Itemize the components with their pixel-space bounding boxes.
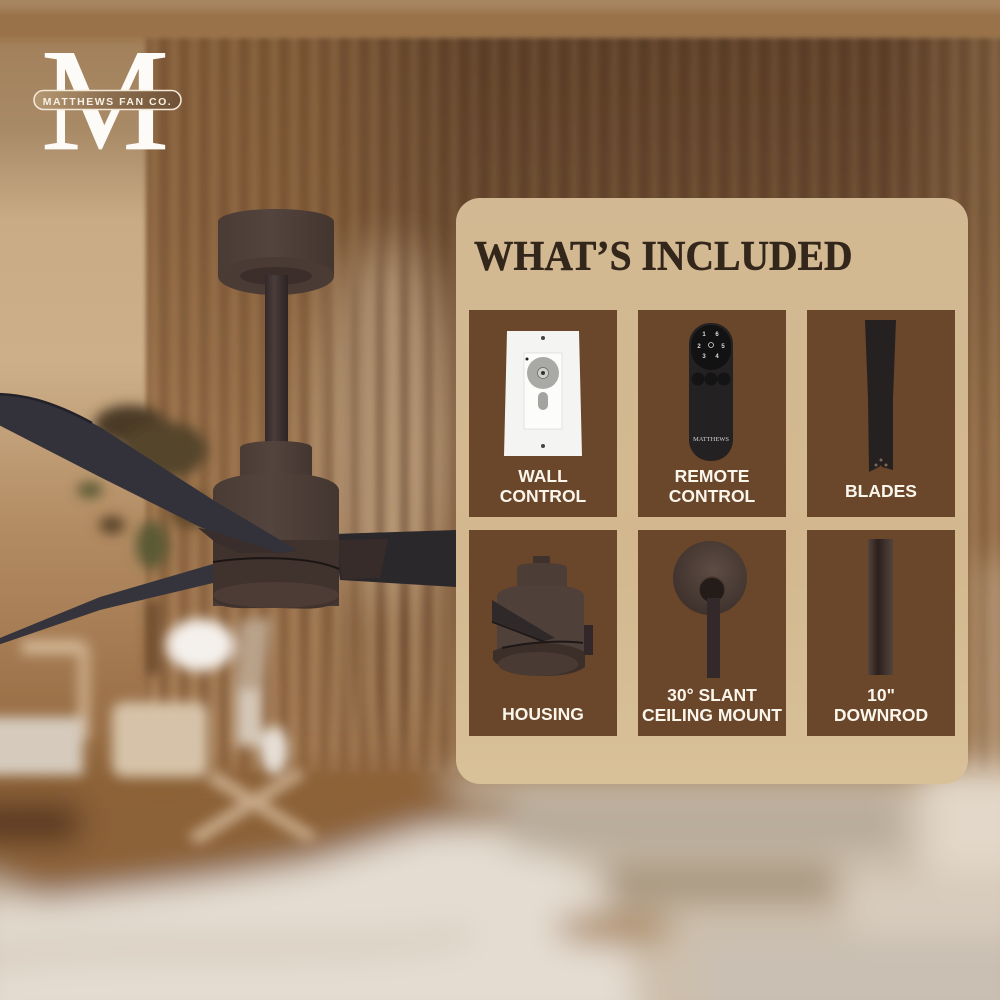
- top ceiling band: [0, 0, 1000, 40]
- label: HOUSING: [502, 704, 584, 724]
- label: [500, 466, 586, 506]
- light patch on wood: [315, 240, 455, 600]
- icon: downrod: [868, 539, 893, 675]
- icon: remote control: MATTHEWS: [693, 436, 729, 443]
- label: WALL: [518, 466, 568, 486]
- logo: Matthews Fan Co.: [33, 40, 182, 160]
- ceiling canopy: [218, 209, 334, 276]
- label: BLADES: [845, 481, 917, 501]
- logo band: MATTHEWS FAN CO.: [43, 96, 172, 108]
- icon: remote control: 2: [697, 344, 701, 350]
- icon: remote control: 3: [702, 354, 706, 360]
- blurred plant: [77, 405, 210, 675]
- light strip right of the panel: [975, 560, 1000, 770]
- fan blade: left upper: [0, 394, 297, 553]
- motor housing: [240, 441, 312, 478]
- label: CONTROL: [500, 486, 586, 506]
- card: 10 inch downrod: [807, 530, 955, 736]
- heading: WHAT’S INCLUDED: [474, 233, 853, 280]
- icon: remote control: 5: [721, 344, 725, 350]
- icon: slant ceiling mount: [673, 541, 747, 678]
- icon: remote control: 1: [702, 332, 706, 338]
- card: 30 degree slant ceiling mount: [638, 530, 786, 736]
- icon: remote control: 6: [715, 332, 719, 338]
- card: remote control: [638, 310, 786, 517]
- card: blades: [807, 310, 955, 517]
- blade bracket: [198, 528, 296, 553]
- label: [834, 685, 928, 724]
- label: DOWNROD: [834, 704, 928, 724]
- icon: wall control: [504, 331, 582, 456]
- label: CEILING MOUNT: [642, 704, 782, 724]
- wood panelled wall: [146, 38, 1000, 773]
- label: [669, 466, 755, 506]
- label: [642, 685, 782, 724]
- ceiling fan: [0, 209, 456, 646]
- fan blade: right: [334, 530, 456, 587]
- card: wall control: [469, 310, 617, 517]
- blurred furniture: [0, 618, 318, 845]
- icon: housing: [492, 556, 593, 676]
- icon: remote control: 4: [715, 354, 719, 360]
- label: 30° SLANT: [667, 685, 757, 705]
- label: 10": [867, 685, 895, 705]
- icon: blade: [865, 320, 896, 472]
- logo band: [34, 90, 181, 110]
- downrod: [265, 275, 288, 443]
- fan blade: left lower: [0, 564, 213, 646]
- floor: [0, 765, 1000, 1000]
- label: REMOTE: [675, 466, 749, 486]
- label: CONTROL: [669, 486, 755, 506]
- panel: what's included: [456, 198, 968, 784]
- icon: remote control: [689, 323, 733, 461]
- card: housing: [469, 530, 617, 736]
